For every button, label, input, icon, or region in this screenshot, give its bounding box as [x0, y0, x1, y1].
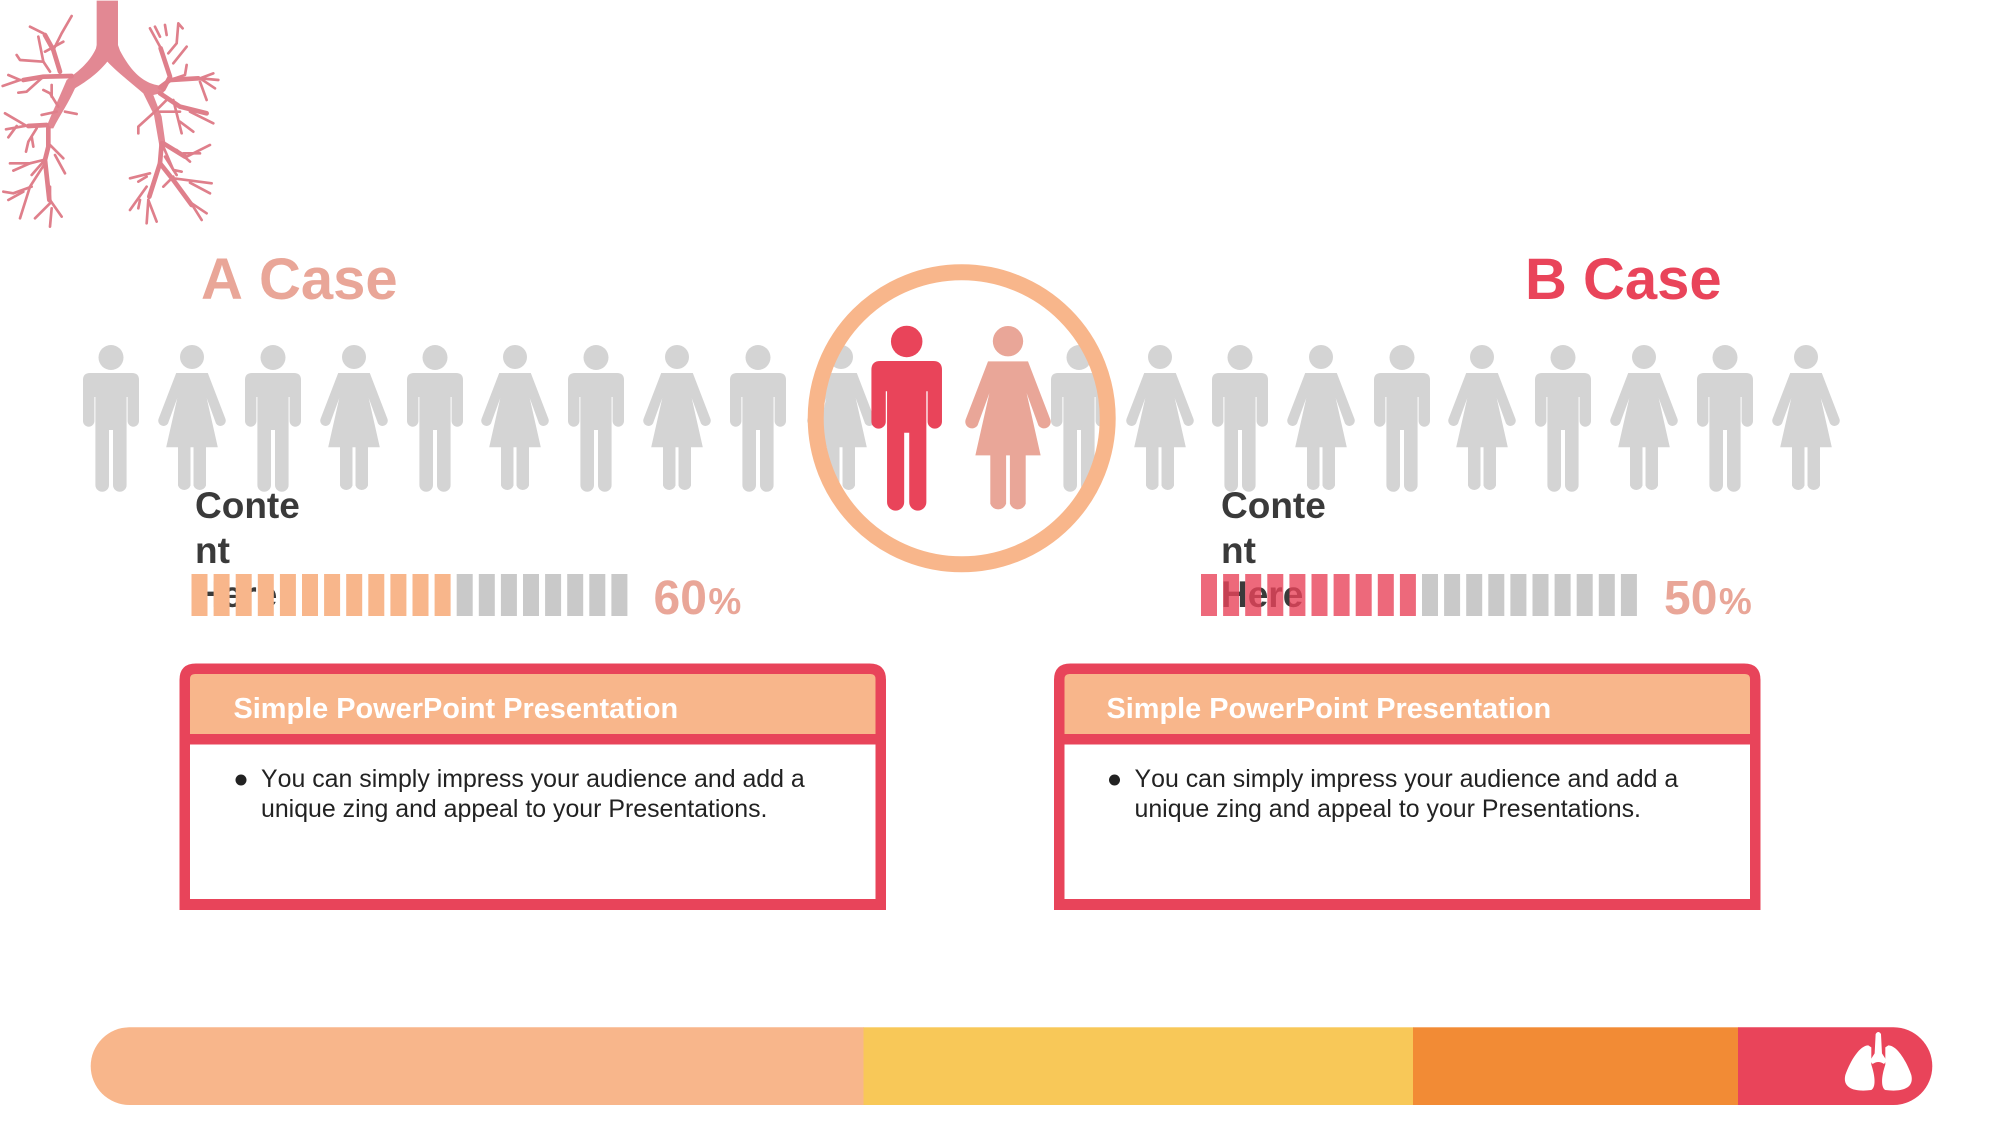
progress bar: B Case 50% — [1201, 574, 1637, 616]
label: right Content Here: Here — [1221, 574, 1303, 615]
heading: B Case: B Case — [1525, 247, 1722, 312]
icon: red man — [871, 326, 942, 511]
label: right Content Here: Conte — [1221, 485, 1326, 526]
illustration: bronchial tree — [3, 1, 218, 227]
card body text: unique zing and appeal to your Presentations. — [1134, 795, 1641, 823]
card body text: unique zing and appeal to your Presentations. — [261, 795, 767, 823]
panel: A Case text card — [180, 664, 886, 910]
value: 60%: 60% — [654, 572, 741, 625]
label: left Content Here: Conte — [195, 485, 300, 526]
progress bar: A Case 60% — [192, 574, 627, 616]
card heading: Simple PowerPoint Presentation — [234, 693, 678, 725]
row of grey figures, right group — [1051, 345, 1840, 492]
icon: white lungs — [1845, 1032, 1912, 1091]
card body text: You can simply impress your audience and add a — [1134, 765, 1678, 793]
label: left Content Here: Here — [195, 574, 277, 615]
heading: A Case: A Case — [201, 247, 398, 312]
row of grey figures, left group — [83, 345, 875, 492]
icon: pink woman — [965, 326, 1051, 509]
bullet — [1109, 774, 1120, 786]
card body text: You can simply impress your audience and add a — [261, 765, 805, 793]
value: 50%: 50% — [1664, 572, 1752, 625]
bullet — [236, 774, 246, 786]
label: left Content Here: nt — [195, 530, 230, 571]
label: right Content Here: nt — [1221, 530, 1256, 571]
card heading: Simple PowerPoint Presentation — [1106, 693, 1551, 725]
central ring — [816, 272, 1108, 564]
panel: B Case text card — [1054, 664, 1760, 910]
footer colour bar — [91, 1027, 1932, 1105]
